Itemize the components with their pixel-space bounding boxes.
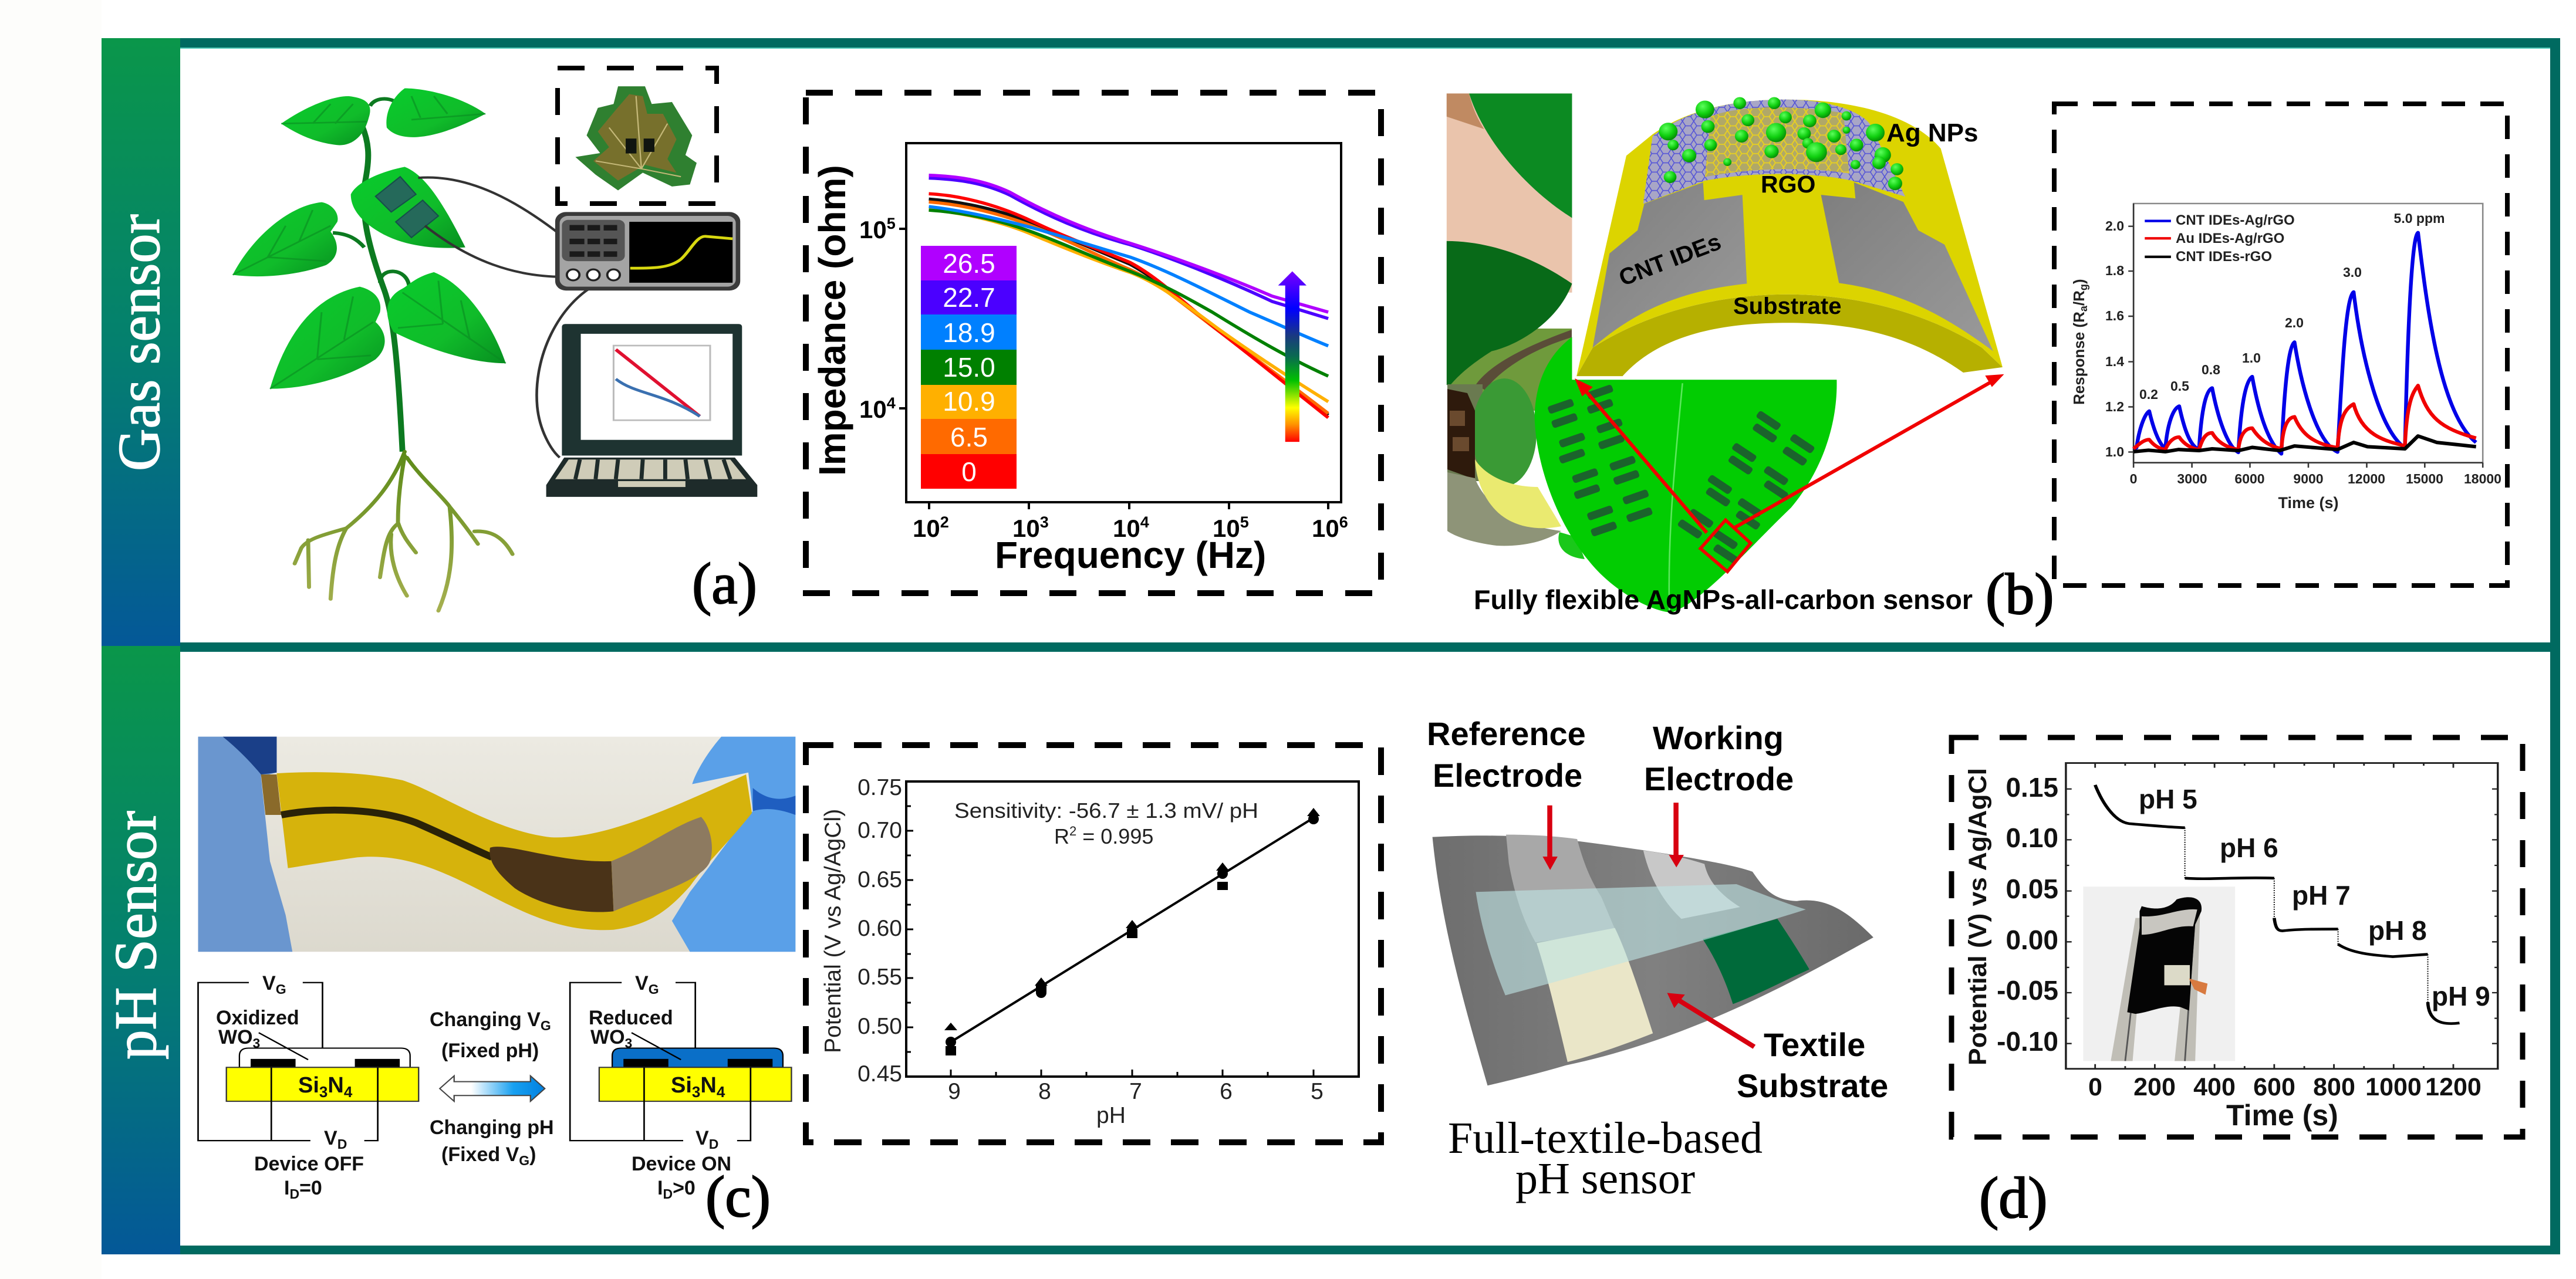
legend: colour blocks: 22.7 (943, 282, 995, 313)
callout: red zoom arrows and selection box (1576, 375, 2003, 571)
photo: plant leaf held by hand (1447, 93, 1836, 613)
leaf with printed sensor arrays (1535, 337, 1836, 613)
labels: textile sensor electrodes: Electrode (1433, 757, 1582, 794)
y tick labels: 1.6 (2105, 308, 2124, 323)
y tick labels: 0.10 (2006, 823, 2058, 853)
concentration labels: 0.5 (2170, 378, 2189, 394)
schematic labels: D (289, 1186, 299, 1202)
inset white background (1572, 93, 2006, 380)
x tick labels (948, 1079, 1324, 1104)
axis tick labels: 5 (1240, 513, 1249, 531)
working electrode strip (1643, 851, 1740, 919)
schematic labels: G (276, 982, 286, 997)
plot frame (906, 143, 1341, 502)
y axis title: Potential (V vs Ag/AgCl) (821, 809, 846, 1053)
schematic labels: Si (298, 1073, 319, 1098)
panel label (c): (c) (705, 1164, 771, 1229)
caption: Fully flexible AgNPs-all-carbon sensor: Fully flexible AgNPs-all-carbon sensor (1474, 584, 1973, 615)
CNT IDE electrodes (1593, 182, 1747, 348)
label: Substrate: Substrate (1733, 293, 1842, 319)
schematic labels: G (519, 1153, 529, 1168)
concentration labels: 2.0 (2285, 315, 2304, 330)
schematic labels: WO (218, 1026, 253, 1048)
concentration labels: 0.8 (2202, 362, 2220, 377)
dashed frame (1952, 737, 2523, 1137)
schematic labels: I (284, 1177, 289, 1199)
x axis title: Time (s) (2226, 1099, 2338, 1132)
panel label (b): (b) (1986, 561, 2054, 627)
heading: Gas sensor: Gas sensor (106, 214, 173, 471)
concentration labels: 1.0 (2242, 350, 2261, 366)
legend: colour blocks: 18.9 (943, 317, 995, 348)
pH step labels: pH 9 (2432, 981, 2490, 1011)
axis tick labels (859, 215, 1348, 542)
schematic labels: N (700, 1073, 717, 1098)
x tick labels: 15000 (2406, 471, 2443, 486)
x tick labels: 18000 (2464, 471, 2501, 486)
plant leaves (232, 88, 506, 389)
x tick labels: 6 (1220, 1079, 1233, 1104)
y tick labels: -0.05 (1997, 975, 2058, 1006)
damaged leaf photo (575, 86, 697, 191)
axis tick labels: 6 (1339, 513, 1348, 531)
y tick labels: 0.50 (857, 1014, 902, 1039)
substrate top (1576, 100, 2003, 376)
translucent film (1476, 884, 1806, 995)
y axis title: Potential (V) vs Ag/AgCl (1964, 768, 1992, 1065)
step transitions (2185, 828, 2428, 1002)
y tick labels (1997, 772, 2058, 1057)
legend text: CNT IDEs-Ag/rGO (2176, 212, 2295, 228)
sensitivity annotation: Sensitivity: -56.7 ± 1.3 mV/ pH (954, 798, 1258, 823)
schematic labels: G (541, 1018, 551, 1033)
schematic labels: 3 (625, 1036, 632, 1051)
caption: Full-textile-based pH sensor (1448, 1114, 1763, 1203)
x tick labels: 1000 (2365, 1073, 2422, 1101)
legend: colour blocks (921, 246, 1017, 489)
y tick labels: 1.0 (2105, 444, 2124, 459)
x tick labels: 800 (2313, 1073, 2355, 1101)
axis tick labels: 3 (1040, 513, 1049, 531)
y tick labels: 0.00 (2006, 925, 2058, 955)
leaf veins (232, 96, 506, 389)
x tick labels: 8 (1038, 1079, 1051, 1104)
y tick labels: 0.55 (857, 965, 902, 990)
legend: colour blocks: 10.9 (943, 386, 995, 417)
schematic labels: V (696, 1127, 709, 1149)
oscilloscope (555, 212, 740, 290)
axis tick labels: 4 (887, 394, 896, 412)
schematic labels: ) (529, 1143, 536, 1166)
y axis title: Response (R (2070, 312, 2088, 405)
dashed frame (2054, 104, 2507, 586)
pH step labels (2139, 784, 2490, 1011)
x tick labels: 0 (2130, 471, 2137, 486)
plot frame and ticks (2128, 204, 2483, 468)
x tick labels (2130, 471, 2501, 486)
y tick labels: 0.15 (2006, 772, 2058, 803)
schematic labels: Changing V (430, 1009, 541, 1031)
schematic labels: V (262, 972, 276, 994)
silver nanoparticles (1659, 97, 1903, 190)
axis tick labels: 5 (887, 215, 896, 232)
labels: textile sensor electrodes: Textile (1764, 1026, 1865, 1063)
plot frame and ticks (2066, 763, 2498, 1069)
concentration labels: 0.2 (2139, 387, 2158, 402)
red arrows (1542, 803, 1754, 1047)
dashed frame (806, 93, 1381, 593)
legend: colour blocks: 6.5 (950, 422, 988, 452)
schematic labels: 3 (253, 1036, 260, 1051)
response curves (2133, 221, 2476, 454)
labels: textile sensor electrodes: Electrode (1644, 760, 1794, 797)
schematic labels: Device ON (632, 1153, 731, 1175)
dashed frame: damaged leaf inset (558, 68, 717, 204)
chart: potential vs time (1952, 737, 2523, 1137)
x tick labels: 6000 (2234, 471, 2265, 486)
label: Ag NPs: Ag NPs (1886, 119, 1978, 147)
pH step labels: pH 6 (2220, 833, 2278, 863)
cream conductive pad (1537, 928, 1653, 1062)
axis ticks (899, 229, 1328, 509)
x tick labels: 600 (2253, 1073, 2295, 1101)
legend text (2176, 212, 2295, 265)
x tick labels: 5 (1311, 1079, 1324, 1104)
y tick labels (2105, 218, 2124, 459)
x tick labels (2088, 1073, 2482, 1101)
schematic labels: Device OFF (254, 1153, 364, 1175)
pH step labels: pH 7 (2292, 880, 2351, 911)
concentration labels: 5.0 ppm (2394, 211, 2445, 226)
legend: colour blocks: 0 (961, 456, 977, 487)
legend: colour blocks: 15.0 (943, 352, 995, 383)
x tick labels: 7 (1129, 1079, 1142, 1104)
axis tick labels: 10 (1012, 515, 1040, 542)
schematic labels: V (635, 972, 649, 994)
y axis title: Impedance (ohm) (811, 165, 853, 476)
schematic labels: 4 (717, 1083, 725, 1101)
panel frame: gas sensor (102, 38, 2560, 652)
labels: textile sensor electrodes: Reference (1427, 715, 1586, 752)
R squared annotation: R (1054, 824, 1069, 848)
axis tick labels: 10 (1312, 515, 1339, 542)
device ON schematic (570, 983, 791, 1141)
x tick labels: 400 (2193, 1073, 2236, 1101)
y axis title: a (2078, 305, 2089, 312)
labels: textile sensor electrodes: Working (1653, 719, 1784, 756)
schematic labels: 3 (319, 1083, 328, 1101)
pH step labels: pH 8 (2368, 915, 2427, 946)
legend text: CNT IDEs-rGO (2176, 249, 2272, 265)
legend: colour blocks: 26.5 (943, 248, 995, 279)
schematic labels: Reduced (589, 1007, 673, 1029)
R squared annotation: 2 (1069, 824, 1076, 838)
schematic labels: I (657, 1177, 663, 1199)
schematic labels: =0 (299, 1177, 322, 1199)
axis tick labels: 10 (1213, 515, 1240, 542)
chart: potential vs pH (806, 745, 1381, 1142)
plot frame and ticks (906, 781, 1359, 1077)
schematic labels: D (663, 1186, 673, 1202)
schematic labels: Si (671, 1073, 692, 1098)
axis tick labels: 4 (1140, 513, 1149, 531)
schematic labels (216, 972, 731, 1202)
dashed frame (806, 745, 1381, 1142)
impedance curves (929, 175, 1328, 418)
schematic labels: (Fixed V (441, 1143, 519, 1166)
substrate side (1576, 295, 2003, 376)
potential trace (2095, 785, 2460, 1024)
x tick labels: 12000 (2348, 471, 2385, 486)
plant roots (295, 452, 512, 611)
illustration: plant with wearable sensor (232, 86, 757, 611)
legend text: Au IDEs-Ag/rGO (2176, 231, 2284, 246)
caption: Full-textile-based pH sensor: Full-textile-based (1448, 1114, 1763, 1163)
schematic labels: V (324, 1127, 337, 1149)
sensor patches on leaf (376, 177, 438, 238)
schematic labels: (Fixed pH) (441, 1040, 539, 1062)
diagram: AgNPs all-carbon sensor on arched substrate (1572, 93, 2006, 380)
y axis title: g (2078, 284, 2089, 290)
panel label (a): (a) (692, 551, 757, 616)
label: RGO: RGO (1761, 171, 1815, 198)
axis tick labels: 2 (940, 513, 949, 531)
x axis title: pH (1096, 1103, 1126, 1128)
R squared annotation: = 0.995 (1076, 824, 1153, 848)
y tick labels: 1.2 (2105, 399, 2124, 414)
concentration labels (2139, 211, 2445, 402)
photo: flexible pH sensor strip held by gloves (198, 737, 795, 952)
arrow: increasing value gradient (1278, 271, 1306, 442)
chart: gas response vs time (2054, 104, 2507, 586)
x tick labels: 200 (2133, 1073, 2176, 1101)
x tick labels: 3000 (2177, 471, 2207, 486)
axis tick labels: 10 (913, 515, 940, 542)
y axis title: ) (2070, 279, 2088, 284)
device OFF schematic (198, 983, 418, 1141)
chart: impedance vs frequency (806, 93, 1381, 593)
y tick labels: 1.4 (2105, 354, 2124, 369)
schematic labels: D (337, 1136, 347, 1152)
y tick labels: 0.60 (857, 916, 902, 941)
plant petioles (333, 99, 409, 287)
pH step labels: pH 5 (2139, 784, 2197, 814)
schematic labels: N (328, 1073, 344, 1098)
panel label (d): (d) (1979, 1165, 2048, 1230)
schematic labels: 3 (692, 1083, 700, 1101)
textile substrate (1433, 835, 1873, 1085)
RGO mesh layer (1643, 100, 1905, 204)
schematic labels: Oxidized (216, 1007, 299, 1029)
sensor wires (418, 177, 596, 458)
x tick labels: 0 (2088, 1073, 2102, 1101)
y tick labels (857, 775, 902, 1087)
x tick labels: 1200 (2425, 1073, 2482, 1101)
data markers (944, 808, 1320, 1055)
x tick labels: 9 (948, 1079, 961, 1104)
y tick labels: -0.10 (1997, 1026, 2058, 1057)
concentration labels: 3.0 (2343, 265, 2362, 280)
labels: textile sensor electrodes (1427, 715, 1888, 1104)
reference electrode strip (1506, 835, 1616, 942)
laptop with graph (546, 324, 757, 497)
axis tick labels: 10 (859, 216, 887, 243)
schematic labels: G (649, 982, 659, 997)
schematic labels: WO (590, 1026, 625, 1048)
schematic labels: 4 (344, 1083, 353, 1101)
axis tick labels: 10 (1113, 515, 1140, 542)
labels: textile sensor electrodes: Substrate (1737, 1067, 1888, 1104)
caption: Full-textile-based pH sensor: pH sensor (1515, 1154, 1695, 1203)
y tick labels: 0.05 (2006, 874, 2058, 904)
y tick labels: 1.8 (2105, 263, 2124, 278)
double-headed arrow (440, 1076, 545, 1101)
x axis title: Frequency (Hz) (995, 534, 1266, 576)
y tick labels: 0.45 (857, 1061, 902, 1087)
panel frame: pH sensor (102, 646, 2560, 1254)
label: CNT IDEs: CNT IDEs (1615, 229, 1724, 291)
green conductive pad (1703, 919, 1809, 1004)
x axis title: Time (s) (2278, 494, 2339, 512)
diagram: WO3 transistor states (198, 983, 791, 1141)
y tick labels: 0.70 (857, 818, 902, 843)
y tick labels: 0.65 (857, 867, 902, 892)
schematic labels: Changing pH (430, 1116, 554, 1139)
inset photo: textile sensor (2083, 886, 2235, 1061)
y tick labels: 0.75 (857, 775, 902, 800)
diagram: full-textile pH sensor (1433, 803, 1873, 1085)
schematic labels: >0 (673, 1177, 696, 1199)
y axis title: /R (2070, 290, 2088, 306)
fit line (951, 818, 1314, 1042)
x tick labels: 9000 (2293, 471, 2324, 486)
schematic labels: D (709, 1136, 718, 1152)
plant stem (362, 126, 403, 452)
y tick labels: 2.0 (2105, 218, 2124, 234)
heading: pH Sensor: pH Sensor (103, 811, 169, 1060)
axis tick labels: 10 (859, 395, 887, 423)
